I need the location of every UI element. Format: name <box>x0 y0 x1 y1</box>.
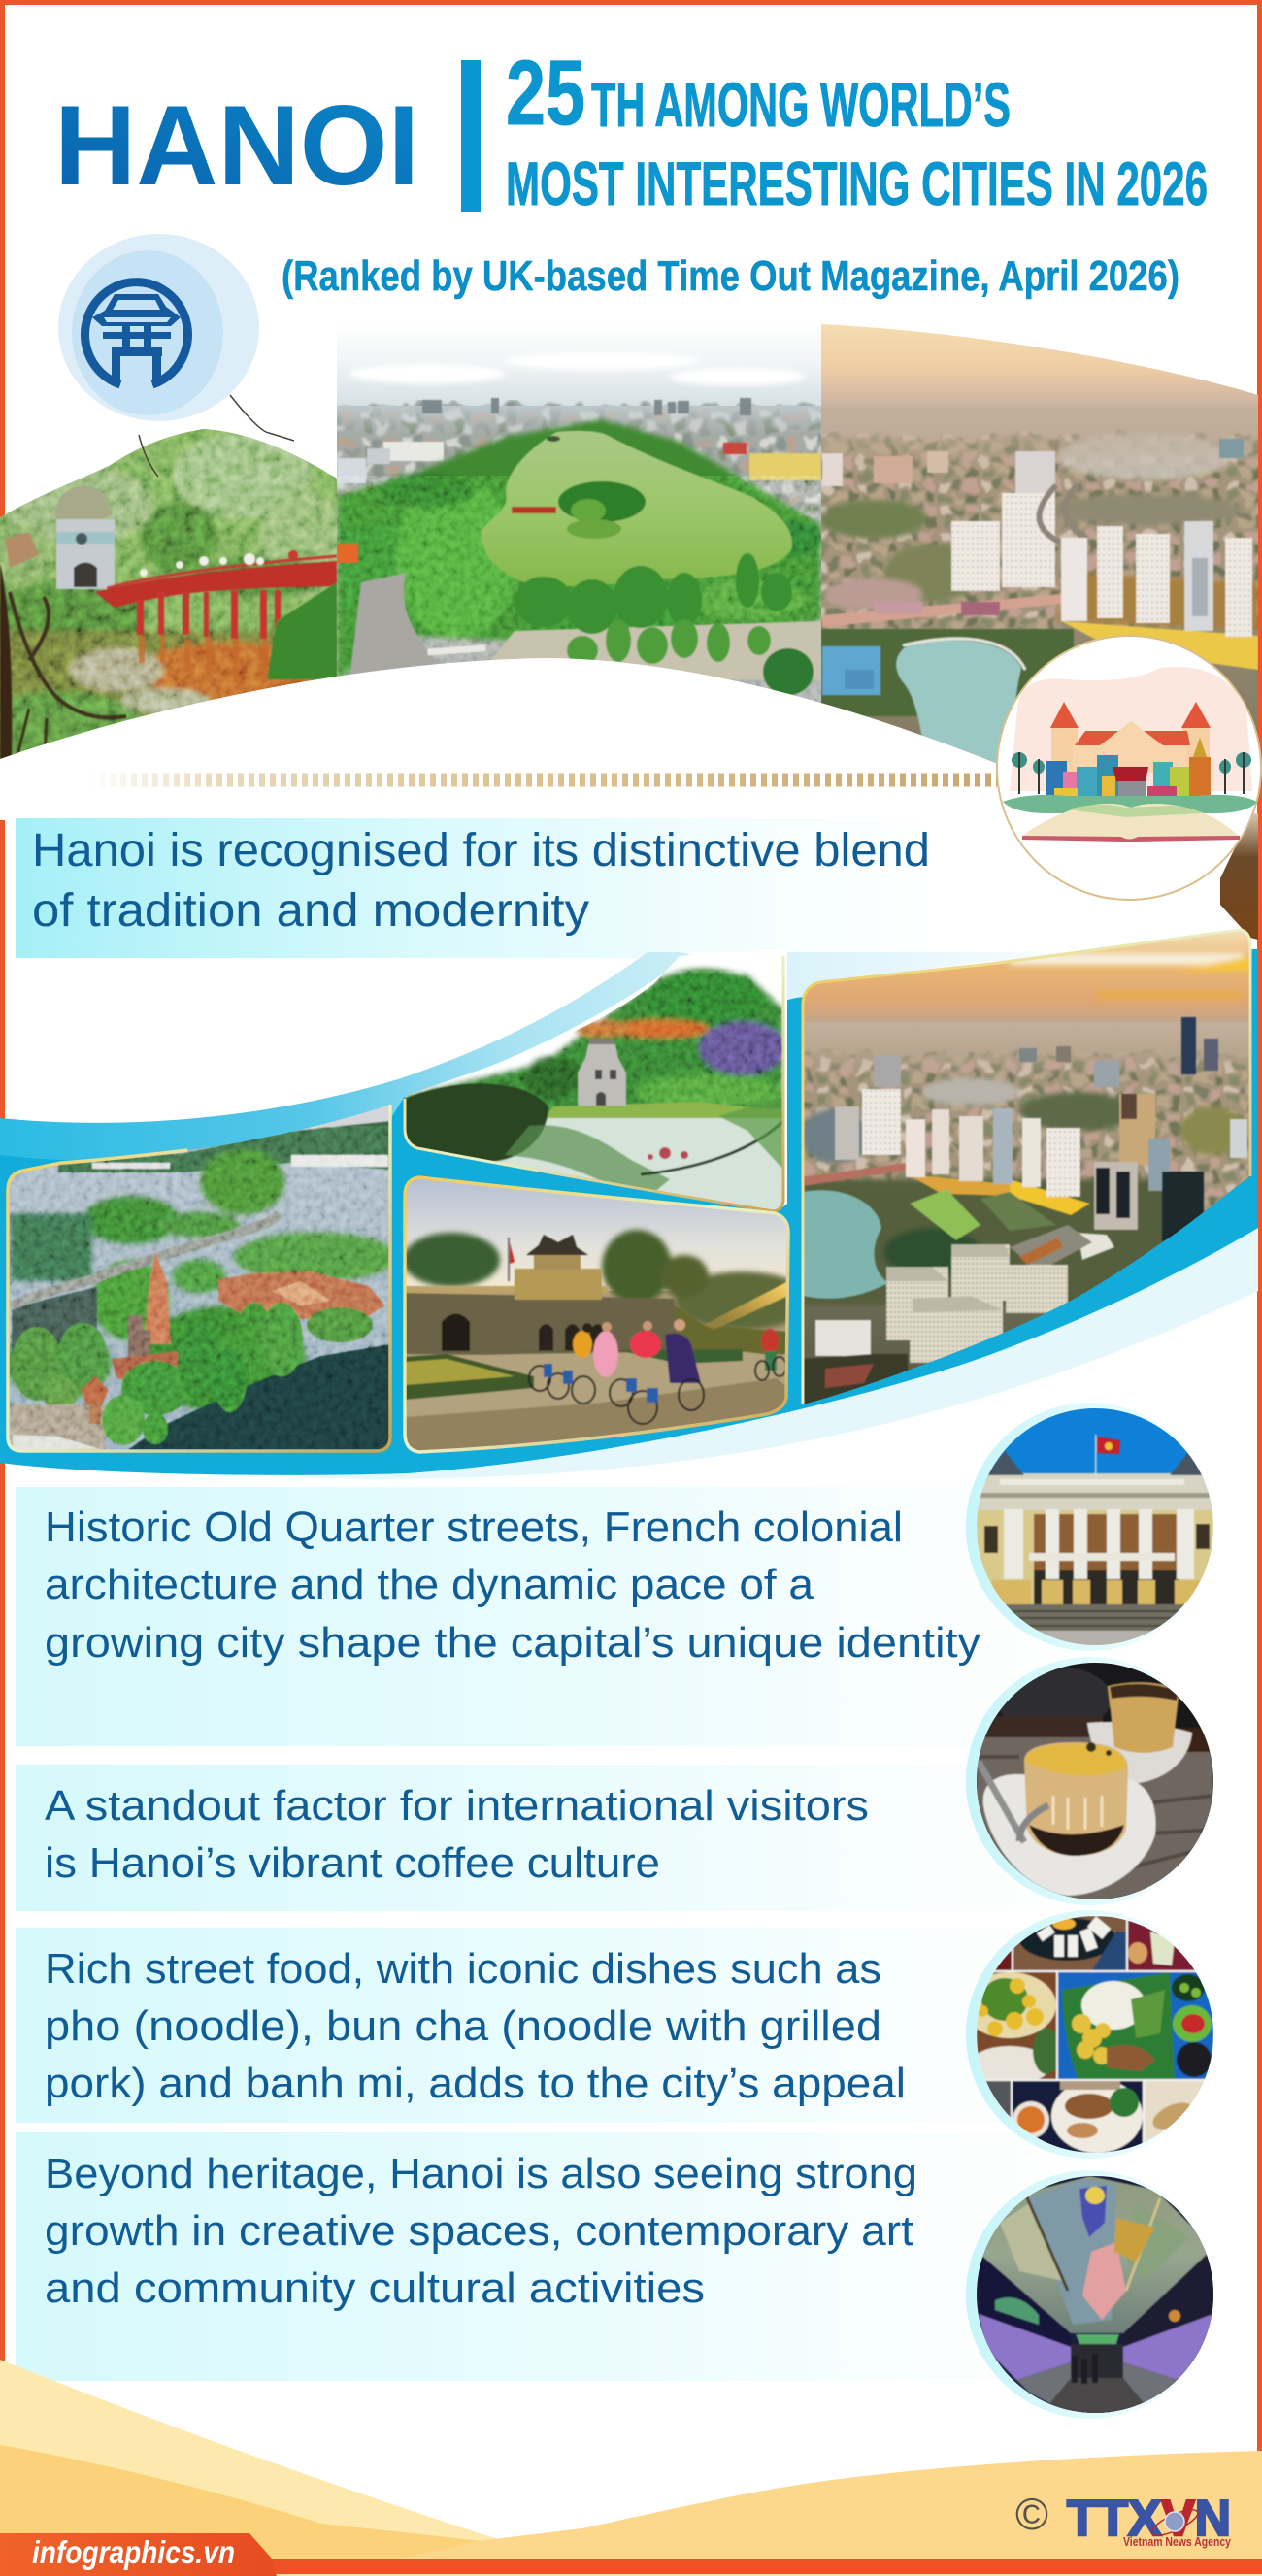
pale band below blue swoosh <box>291 1228 1258 1479</box>
footer tag: infographics.vn: infographics.vn <box>32 2534 235 2570</box>
city fragment behind illustration <box>1220 813 1258 940</box>
panel: text box, street food <box>16 1928 1113 2123</box>
panel: text box, coffee culture <box>16 1765 1113 1911</box>
panel: text box, creative spaces <box>16 2132 1113 2381</box>
heading: 25th among world's most interesting cities <box>506 42 1208 218</box>
hero branches <box>139 395 294 477</box>
logo: Hanoi city emblem <box>58 234 259 421</box>
panel: text box, creative spaces: growth in creative spaces, contemporary art <box>45 2207 913 2255</box>
panel: text box, Old Quarter: growing city shape the capital’s unique identity <box>45 1619 980 1667</box>
circle photo: illuminated art tunnel <box>966 2170 1214 2419</box>
panel: text box, Old Quarter: Historic Old Quarter streets, French colonial <box>45 1503 903 1551</box>
panel: hero photo, Huc bridge <box>0 429 337 759</box>
panel: intro text box: Hanoi is recognised for its distinctive blend <box>32 825 930 876</box>
panel: text box, coffee culture: A standout factor for international visitors <box>45 1782 869 1830</box>
footer gold waves <box>0 2360 1262 2576</box>
illustration: open book <box>1022 804 1240 842</box>
decorative gold stripe band <box>88 773 998 786</box>
title: HANOI: HANOI <box>54 82 419 209</box>
panel: text box, coffee culture: is Hanoi’s vibrant coffee culture <box>45 1839 660 1887</box>
illustration: colourful city <box>1046 738 1211 802</box>
panel: intro text box <box>16 818 1025 958</box>
pale tint above skyline photo <box>787 952 1219 1000</box>
photo: modern Hanoi skyline at sunset <box>796 927 1262 1410</box>
illustration: towers and hall <box>1050 702 1211 773</box>
blue swoosh background <box>0 949 1258 1475</box>
copyright mark: © <box>1015 2489 1048 2539</box>
panel: text box, street food: Rich street food, with iconic dishes such as <box>45 1945 881 1993</box>
photo: Tran Quoc pagoda on West Lake <box>5 1097 398 1452</box>
illustration: trees <box>1012 752 1251 794</box>
heading: 25th among world's most interesting cities: 25 <box>506 42 585 145</box>
photo: Turtle Tower on Hoan Kiem Lake <box>405 949 787 1224</box>
panel: text box, creative spaces: and community cultural activities <box>45 2264 705 2312</box>
footer red band <box>0 2559 1262 2574</box>
panel: text box, street food: pork) and banh mi, adds to the city’s appeal <box>45 2060 906 2107</box>
heading: 25th among world's most interesting cities: TH AMONG WORLD’S <box>591 70 1011 140</box>
circle photo: Hanoi street food platter <box>963 1910 1214 2159</box>
lower white dome <box>0 658 1010 820</box>
title divider bar <box>461 60 481 212</box>
panel: text box, Old Quarter <box>16 1487 1113 1746</box>
panel: intro text box: of tradition and modernity <box>32 885 589 937</box>
TTXVN logo: Vietnam News Agency <box>1123 2534 1232 2549</box>
photo: Thang Long Citadel with cyclists <box>403 1176 811 1456</box>
TTXVN logo: TTXVN <box>1067 2491 1231 2547</box>
circle photo: Hanoi Opera House <box>966 1403 1214 1651</box>
panel: text box, Old Quarter: architecture and the dynamic pace of a <box>45 1561 814 1608</box>
panel: text box, creative spaces: Beyond heritage, Hanoi is also seeing strong <box>45 2150 917 2197</box>
panel: hero photo, Hoan Kiem lake <box>337 346 821 703</box>
panel: text box, street food: pho (noodle), bun cha (noodle with grilled <box>45 2002 881 2050</box>
panel: hero photo, modern skyline <box>814 324 1262 776</box>
circle photo: egg coffee <box>966 1657 1214 1905</box>
illustration: book with city in circle <box>997 636 1261 900</box>
